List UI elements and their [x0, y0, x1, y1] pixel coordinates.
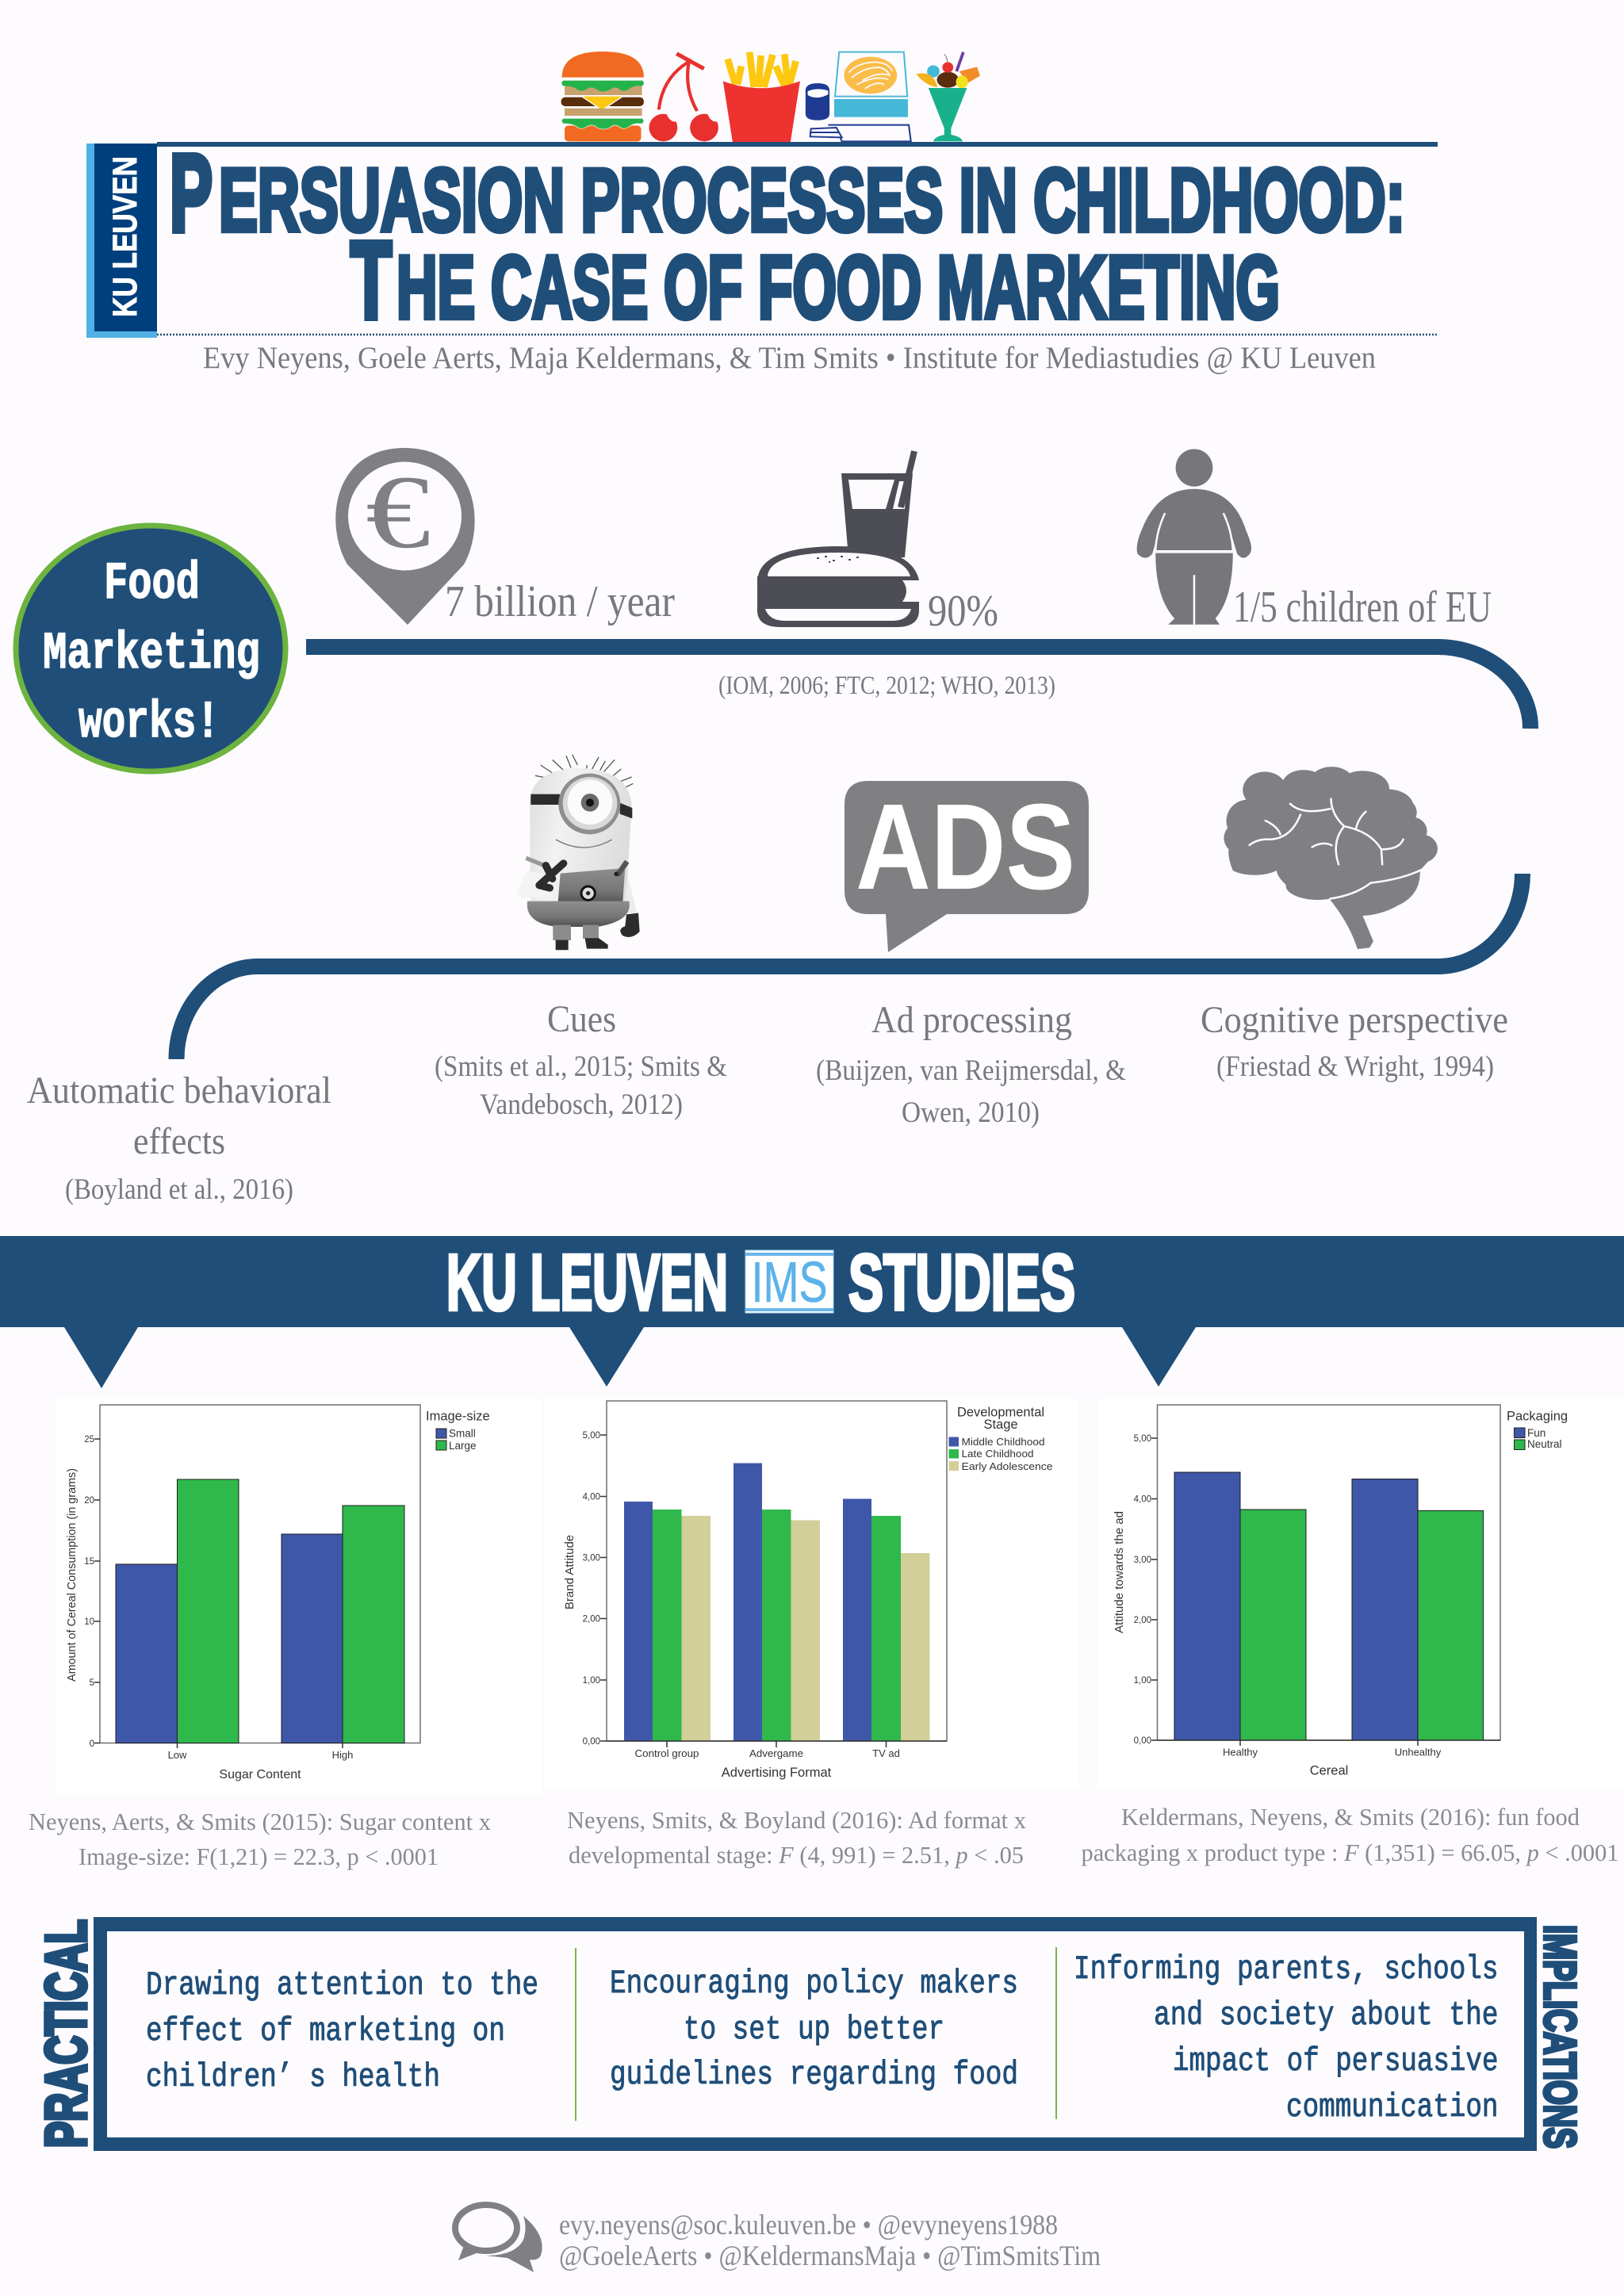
title: P [170, 132, 213, 254]
caption: study 1: Neyens, Aerts, & Smits (2015): Sugar content x [29, 1808, 491, 1835]
icon: laptop with noodles [810, 52, 911, 141]
chart: advertising format: Brand Attitude [563, 1535, 576, 1609]
chart: advertising format: Advergame [749, 1747, 803, 1759]
legend: developmental stage: Middle Childhood [961, 1436, 1045, 1448]
caption: study 2: developmental stage: F (4, 991) = 2.51, p < .05 [569, 1841, 1024, 1869]
chart: cereal packaging: 2,00 [1134, 1616, 1151, 1625]
chart: advertising format [544, 1399, 1078, 1788]
legend: image size [426, 1410, 490, 1452]
text: cues: Cues [547, 998, 616, 1040]
chart: advertising format: TV ad [872, 1747, 900, 1759]
text: automatic behavioral effects: effects [133, 1120, 225, 1162]
text: cues: (Smits et al., 2015; Smits & [435, 1050, 727, 1083]
chart: advertising format: 2,00 [583, 1614, 600, 1624]
icon: euro pin [335, 448, 475, 625]
icon: hamburger [561, 52, 644, 141]
panel: practical implications [94, 1917, 1537, 2151]
chart: sugar content: Amount of Cereal Consumption (in grams) [66, 1468, 79, 1682]
chart: advertising format: Advertising Format [722, 1766, 832, 1780]
text: drawing attention: effect of marketing on [146, 2012, 505, 2050]
heading: implications: IMPLICATIONS [1534, 1925, 1585, 2149]
text: ad processing: (Buijzen, van Reijmersdal, & [816, 1054, 1126, 1087]
text: drawing attention [146, 1966, 538, 2096]
banner: KU Leuven IMS studies [0, 1236, 1624, 1388]
caption: study 2 [567, 1806, 1026, 1869]
icon: cherries [649, 54, 718, 141]
text: automatic behavioral effects: Automatic behavioral [27, 1070, 331, 1112]
chart: cereal packaging: Cereal [1310, 1763, 1348, 1777]
text: ad processing: Ad processing [871, 999, 1072, 1041]
chart: cereal packaging: 5,00 [1134, 1434, 1151, 1444]
chart: cereal packaging: 3,00 [1134, 1556, 1151, 1565]
banner: KU Leuven IMS studies: KU LEUVEN [446, 1238, 728, 1327]
chart: advertising format: 5,00 [583, 1431, 600, 1441]
icon: soda can [806, 83, 829, 121]
banner: KU Leuven IMS studies: STUDIES [848, 1238, 1075, 1327]
text: informing parents: and society about the [1154, 1996, 1499, 2034]
icon: minion [517, 755, 640, 950]
chart: sugar content: 5 [90, 1678, 94, 1688]
heading: practical: PRACTICAL [35, 1919, 98, 2148]
chart: sugar content: Sugar Content [219, 1768, 301, 1781]
title: T [350, 220, 392, 342]
legend: packaging: Packaging [1507, 1410, 1568, 1424]
icon: ADS speech bubble [845, 779, 1089, 952]
legend: packaging: Neutral [1527, 1438, 1562, 1450]
text: encouraging policy makers: guidelines regarding food [610, 2056, 1018, 2094]
icon: food illustrations [561, 52, 980, 142]
chart: cereal packaging: Healthy [1223, 1746, 1258, 1758]
text: encouraging policy makers [610, 1965, 1018, 2094]
legend: packaging [1507, 1410, 1568, 1450]
text: informing parents: communication [1286, 2088, 1499, 2126]
icon: ADS speech bubble: ADS [856, 779, 1075, 915]
text: cues: Vandebosch, 2012) [480, 1089, 683, 1121]
chart: sugar content: 15 [84, 1557, 94, 1567]
text: encouraging policy makers: Encouraging policy makers [610, 1965, 1018, 2003]
text: informing parents: impact of persuasive [1173, 2042, 1499, 2080]
title [170, 132, 1405, 342]
legend: developmental stage [948, 1405, 1053, 1472]
text: automatic behavioral effects: (Boyland et al., 2016) [65, 1173, 293, 1206]
icon: ice cream sundae [916, 52, 980, 141]
badge: food marketing works: works! [79, 693, 220, 752]
contact details: evy.neyens@soc.kuleuven.be • @evyneyens1988 [559, 2209, 1058, 2241]
legend: developmental stage: Developmental [957, 1405, 1044, 1419]
stat: marketing spend: 7 billion / year [445, 577, 675, 626]
legend: developmental stage: Stage [983, 1418, 1018, 1432]
logo: IMS: IMS [752, 1251, 828, 1314]
logo: KU Leuven [86, 144, 157, 338]
chart: sugar content: Low [168, 1749, 187, 1761]
badge: food marketing works [16, 526, 285, 771]
text: automatic behavioral effects [27, 1070, 331, 1206]
stat: percentage: 90% [928, 587, 998, 636]
text: cognitive perspective [1201, 999, 1508, 1083]
legend: image size: Large [449, 1440, 477, 1452]
chart: advertising format: 4,00 [583, 1492, 600, 1502]
legend: developmental stage: Early Adolescence [961, 1460, 1053, 1472]
text: encouraging policy makers: to set up better [684, 2011, 944, 2049]
arrow path: bottom timeline [176, 874, 1522, 1059]
chart: cereal packaging: 4,00 [1134, 1495, 1151, 1505]
caption: study 2: Neyens, Smits, & Boyland (2016): Ad format x [567, 1806, 1026, 1834]
text: cues [435, 998, 727, 1121]
arrow path: top timeline [306, 647, 1530, 729]
legend: image size: Small [449, 1427, 476, 1440]
chart: cereal packaging: Unhealthy [1395, 1746, 1442, 1758]
caption: study 3 [1082, 1803, 1619, 1866]
text: drawing attention: Drawing attention to the [146, 1966, 538, 2004]
icon: brain [1224, 767, 1438, 949]
chart: sugar content: 10 [84, 1617, 94, 1627]
chart: sugar content: 25 [84, 1435, 94, 1445]
icon: chat bubbles [455, 2205, 542, 2272]
chart: cereal packaging: Attitude towards the ad [1113, 1511, 1126, 1633]
stat references: (IOM, 2006; FTC, 2012; WHO, 2013) [718, 672, 1055, 700]
text: cognitive perspective: (Friestad & Wright, 1994) [1216, 1050, 1494, 1083]
badge: food marketing works: Marketing [43, 624, 260, 683]
stat: children: 1/5 children of EU [1233, 583, 1492, 632]
chart: sugar content: 0 [90, 1739, 94, 1749]
icon: euro pin: € [366, 453, 431, 570]
caption: study 3: Keldermans, Neyens, & Smits (2016): fun food [1121, 1803, 1580, 1831]
legend: developmental stage: Late Childhood [961, 1448, 1034, 1460]
chart: sugar content: 20 [84, 1496, 94, 1506]
text: cognitive perspective: Cognitive perspective [1201, 999, 1508, 1041]
chart: advertising format: 3,00 [583, 1554, 600, 1563]
text: informing parents [1074, 1950, 1499, 2126]
icon: fries [723, 52, 800, 142]
text: ad processing: Owen, 2010) [902, 1096, 1040, 1129]
text: informing parents: Informing parents, schools [1074, 1950, 1499, 1988]
text: drawing attention: children’ s health [146, 2058, 440, 2096]
caption: study 1: Image-size: F(1,21) = 22.3, p < .0001 [79, 1843, 439, 1870]
chart: cereal packaging: 0,00 [1134, 1736, 1151, 1746]
decorative title rules [157, 142, 1438, 335]
chart: advertising format: 0,00 [583, 1737, 600, 1747]
logo: KU Leuven: KU LEUVEN [106, 156, 144, 317]
badge: food marketing works: Food [104, 554, 200, 614]
caption: study 3: packaging x product type : F (1,351) = 66.05, p < .0001 [1082, 1839, 1619, 1866]
icon: burger and drink [757, 451, 919, 627]
contact details: @GoeleAerts • @KeldermansMaja • @TimSmitsTim [559, 2240, 1101, 2271]
chart: cereal packaging [1098, 1399, 1624, 1788]
chart: advertising format: 1,00 [583, 1676, 600, 1686]
contact details [559, 2209, 1101, 2271]
chart: sugar content: High [332, 1749, 353, 1761]
chart: sugar content [56, 1399, 542, 1794]
chart: cereal packaging: 1,00 [1134, 1676, 1151, 1686]
text: ad processing [816, 999, 1126, 1129]
caption: study 1 [29, 1808, 491, 1870]
chart: advertising format: Control group [634, 1747, 699, 1759]
legend: image size: Image-size [426, 1410, 490, 1424]
icon: obese child [1137, 449, 1251, 625]
legend: packaging: Fun [1527, 1427, 1545, 1439]
authors line: Evy Neyens, Goele Aerts, Maja Keldermans, & Tim Smits • Institute for Mediastudies @ KU Leuven [203, 341, 1376, 375]
